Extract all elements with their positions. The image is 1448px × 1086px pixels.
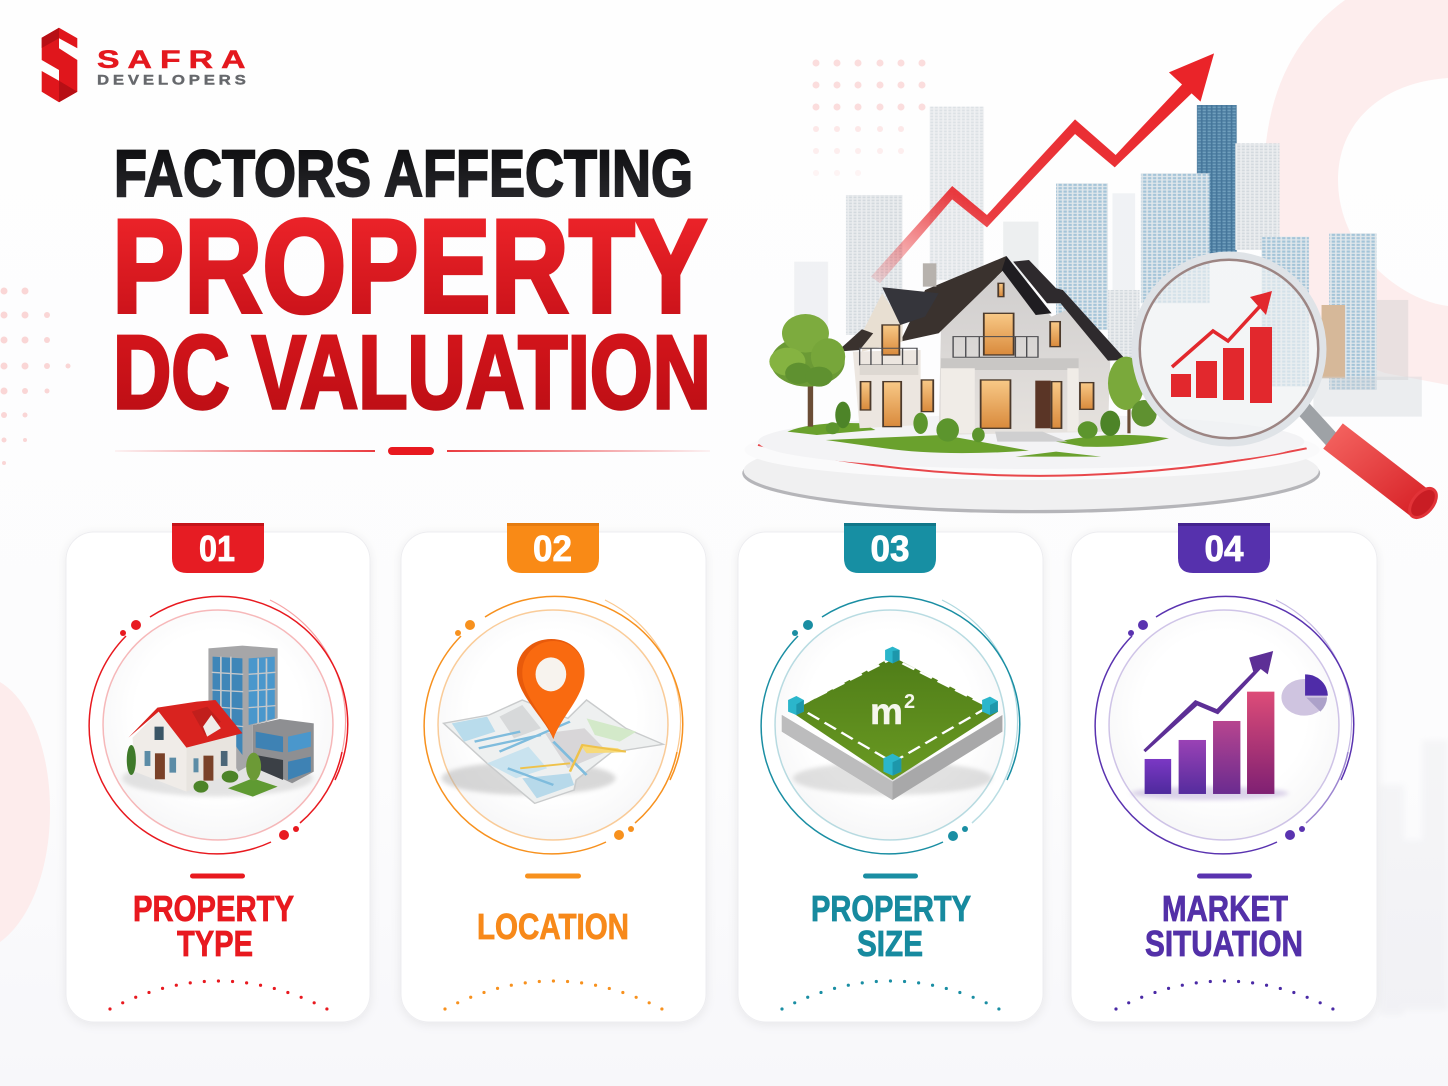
title line: property: PROPERTY	[112, 193, 707, 341]
trees and shrubs	[769, 314, 1157, 442]
number badge: 03	[870, 528, 910, 569]
label: SIZE	[857, 923, 923, 964]
decorative dots behind skyline	[812, 60, 926, 176]
number badge	[507, 523, 599, 573]
card panel	[1071, 532, 1377, 1022]
label: PROPERTY	[133, 888, 294, 929]
platform	[742, 414, 1320, 513]
label divider	[1197, 874, 1252, 878]
number badge: 01	[199, 528, 235, 569]
label: LOCATION	[477, 906, 629, 947]
dotted arc	[445, 981, 662, 1009]
label divider	[863, 874, 918, 878]
dotted arc	[110, 981, 327, 1009]
card 4: market situation	[1071, 523, 1377, 1022]
steps	[995, 432, 1067, 442]
circle frame	[89, 596, 348, 854]
lawn	[787, 423, 1169, 457]
magnifier handle	[1300, 405, 1442, 522]
dotted arc	[782, 981, 999, 1009]
decorative pink circle left	[0, 682, 50, 942]
icon: bar chart with arrow and pie	[1131, 651, 1328, 800]
magnifying glass	[1135, 255, 1442, 522]
number badge	[172, 523, 264, 573]
title	[112, 136, 711, 431]
card 2: location	[401, 523, 706, 1022]
icon: S mark	[42, 28, 77, 102]
logo wordmark: SAFRA	[97, 46, 246, 74]
house windows	[861, 283, 1094, 428]
skyline buildings	[794, 105, 1422, 417]
dotted arc	[1116, 981, 1333, 1009]
decorative pink ring top right	[1264, 0, 1448, 385]
icon: map and location pin	[441, 639, 663, 803]
label: MARKET	[1162, 888, 1288, 929]
balconies	[860, 337, 1038, 365]
number badge	[1178, 523, 1270, 573]
rising red arrow	[871, 53, 1214, 283]
decorative dots left	[0, 288, 70, 465]
label divider	[190, 874, 245, 878]
number badge: 04	[1204, 528, 1244, 569]
circle frame	[761, 596, 1020, 854]
decorative faint skyline bottom right	[1380, 740, 1448, 1015]
card panel	[66, 532, 370, 1022]
card panel	[738, 532, 1043, 1022]
number badge	[844, 523, 936, 573]
house	[837, 256, 1126, 442]
icon: grass plot with m2: m	[870, 691, 903, 732]
magnifier lens	[1138, 258, 1320, 440]
label: SITUATION	[1145, 923, 1303, 964]
icon: grass plot with m2	[782, 647, 1002, 800]
lens chart	[1171, 291, 1272, 403]
label divider	[525, 874, 581, 878]
card 1: property type	[66, 523, 370, 1022]
card panel	[401, 532, 706, 1022]
number badge: 02	[533, 528, 572, 569]
title line: factors affecting: FACTORS AFFECTING	[114, 136, 693, 210]
label	[133, 888, 294, 964]
card 3: property size	[738, 523, 1043, 1022]
circle frame	[1095, 596, 1354, 854]
icon: house and office building	[122, 646, 314, 797]
label	[1145, 888, 1303, 964]
logo	[42, 28, 246, 102]
title line: dc valuation: DC VALUATION	[113, 315, 711, 431]
icon: grass plot with m2: 2	[904, 691, 915, 713]
label: TYPE	[177, 923, 253, 964]
house door	[1035, 381, 1051, 428]
label	[811, 888, 971, 964]
label: PROPERTY	[811, 888, 971, 929]
circle frame	[424, 596, 683, 854]
hero illustration	[742, 53, 1442, 522]
title divider	[115, 447, 710, 455]
logo subtitle: DEVELOPERS	[97, 73, 246, 88]
